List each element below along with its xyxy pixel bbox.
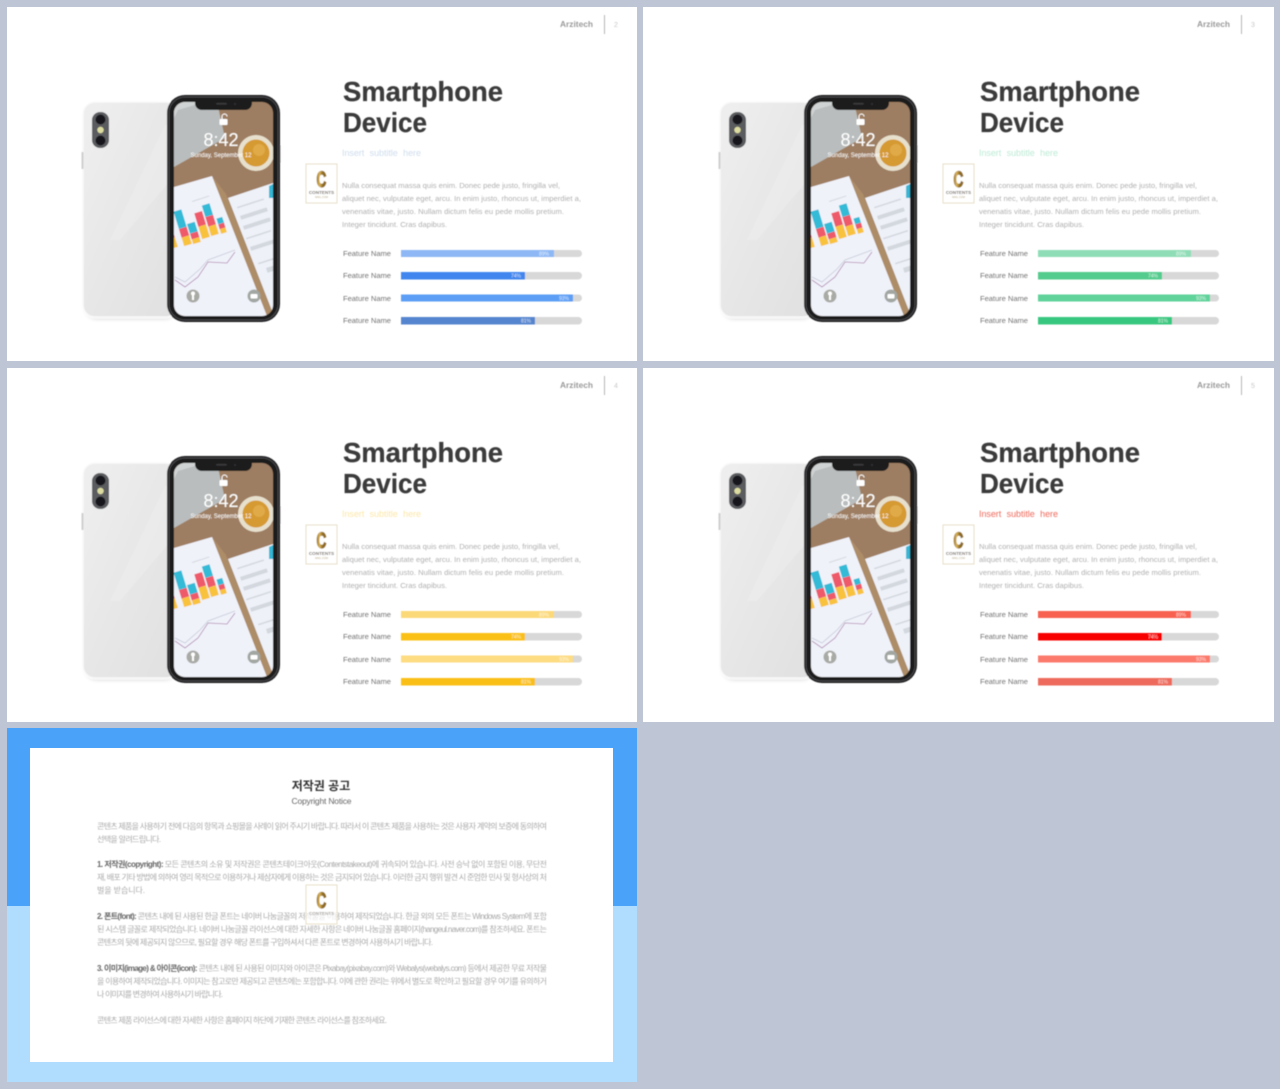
bar chart: feature ratings: Feature Name xyxy=(980,249,1028,258)
text block: copyright terms: 콘텐츠 제품을 사용하기 전에 다음의 항목과 쇼핑몰을 사례이 읽어 주시기 바랍니다. 따라서 이 콘텐츠 제품을 사용하는 것은 사용자 계약의 보증에 동의하여 xyxy=(97,821,547,831)
icon: contents logo: MAIL.COM xyxy=(315,556,328,560)
text block: copyright terms xyxy=(97,821,548,1025)
bar chart: feature ratings: 81% xyxy=(1158,680,1169,686)
icon: smartphone front and back: 8:42 xyxy=(840,491,876,511)
body paragraph: aliquet nec, vulputate eget, arcu. In enim justo, rhoncus ut, imperdiet a, xyxy=(342,555,581,564)
panel: smartphone slide 4, yellow xyxy=(7,368,637,722)
body paragraph: aliquet nec, vulputate eget, arcu. In enim justo, rhoncus ut, imperdiet a, xyxy=(979,555,1218,564)
text block: copyright terms: 1. 저작권(copyright): 모든 콘텐츠의 소유 및 저작권은 콘텐츠테이크아웃(Contentstakeout)에 귀속되어 있습니다. 사전 승낙 없이 포함된 이용, 무단전 xyxy=(97,859,547,869)
bar chart: feature ratings: 74% xyxy=(1148,635,1159,641)
icon: smartphone front and back: Sunday, September 12 xyxy=(191,153,252,159)
header: brand and page number xyxy=(1197,376,1255,395)
bar chart: feature ratings: 81% xyxy=(521,680,532,686)
panel: copyright notice slide xyxy=(7,728,637,1082)
bar chart: feature ratings: Feature Name xyxy=(343,271,391,280)
header: brand and page number: 2 xyxy=(614,22,618,29)
header: brand and page number: 4 xyxy=(614,383,618,390)
title: Smartphone xyxy=(343,76,503,107)
body paragraph xyxy=(979,181,1218,229)
bar chart: feature ratings xyxy=(343,249,582,325)
text block: copyright terms: 선택을 알려드립니다. xyxy=(97,834,161,844)
bar chart: feature ratings: 74% xyxy=(511,635,522,641)
icon: smartphone front and back xyxy=(82,95,280,322)
bar chart: feature ratings: 81% xyxy=(1158,318,1169,324)
header: brand and page number xyxy=(560,376,618,395)
icon: smartphone front and back: 8:42 xyxy=(203,491,239,511)
header: brand and page number xyxy=(560,15,618,34)
icon: contents logo watermark xyxy=(306,885,337,924)
bar chart: feature ratings: Feature Name xyxy=(343,677,391,686)
icon: smartphone front and back xyxy=(718,456,918,683)
icon: smartphone front and back: 8:42 xyxy=(840,130,876,150)
title: Smartphone xyxy=(343,437,503,468)
header: brand and page number: Arzitech xyxy=(1197,381,1230,390)
body paragraph: Nulla consequat massa quis enim. Donec pede justo, fringilla vel, xyxy=(979,542,1197,551)
bar chart: feature ratings: Feature Name xyxy=(980,294,1028,303)
header: brand and page number: Arzitech xyxy=(1197,20,1230,29)
bar chart: feature ratings: 93% xyxy=(1196,657,1207,663)
body paragraph: Integer tincidunt. Cras dapibus. xyxy=(979,220,1084,229)
icon: contents logo xyxy=(306,164,337,203)
bar chart: feature ratings: Feature Name xyxy=(980,271,1028,280)
bar chart: feature ratings: Feature Name xyxy=(343,655,391,664)
title xyxy=(343,437,503,499)
bar chart: feature ratings: 89% xyxy=(539,612,550,618)
bar chart: feature ratings: Feature Name xyxy=(343,632,391,641)
icon: smartphone front and back xyxy=(718,95,918,322)
body paragraph xyxy=(979,542,1218,590)
bar chart: feature ratings: Feature Name xyxy=(343,294,391,303)
icon: contents logo xyxy=(943,525,974,564)
icon: contents logo: CONTENTS xyxy=(946,190,971,195)
icon: contents logo watermark: CONTENTS xyxy=(309,911,334,916)
icon: contents logo watermark: C xyxy=(316,888,326,913)
bar chart: feature ratings: 89% xyxy=(539,251,550,257)
bar chart: feature ratings: 93% xyxy=(559,296,570,302)
icon: contents logo: C xyxy=(316,528,326,553)
title xyxy=(343,76,503,138)
header: brand and page number: 5 xyxy=(1251,383,1255,390)
icon: contents logo: MAIL.COM xyxy=(315,195,328,199)
bar chart: feature ratings: 89% xyxy=(1176,612,1187,618)
body paragraph: Nulla consequat massa quis enim. Donec pede justo, fringilla vel, xyxy=(342,542,560,551)
heading: copyright notice xyxy=(292,778,352,806)
text block: copyright terms: 콘텐츠 제품 라이선스에 대한 자세한 사항은 홈페이지 하단에 기재한 콘텐츠 라이선스를 참조하세요. xyxy=(97,1015,387,1025)
text block: copyright terms: 나 이미지를 변경하여 사용하시기 바랍니다. xyxy=(97,989,223,999)
bar chart: feature ratings: Feature Name xyxy=(980,677,1028,686)
title: Device xyxy=(980,468,1064,499)
icon: smartphone front and back xyxy=(82,456,280,683)
bar chart: feature ratings: 89% xyxy=(1176,251,1187,257)
header: brand and page number xyxy=(1197,15,1255,34)
bar chart: feature ratings xyxy=(343,610,582,686)
panel: smartphone slide 5, red xyxy=(643,368,1274,722)
bar chart: feature ratings: Feature Name xyxy=(980,632,1028,641)
icon: smartphone front and back: Sunday, September 12 xyxy=(191,514,252,520)
heading: copyright notice: 저작권 공고 xyxy=(292,778,350,793)
bar chart: feature ratings: Feature Name xyxy=(343,316,391,325)
body paragraph: aliquet nec, vulputate eget, arcu. In enim justo, rhoncus ut, imperdiet a, xyxy=(979,194,1218,203)
title: Smartphone xyxy=(980,76,1140,107)
bar chart: feature ratings: 93% xyxy=(559,657,570,663)
body paragraph xyxy=(342,181,581,229)
header: brand and page number: 3 xyxy=(1251,22,1255,29)
bar chart: feature ratings: 93% xyxy=(1196,296,1207,302)
header: brand and page number: Arzitech xyxy=(560,381,593,390)
icon: contents logo: MAIL.COM xyxy=(952,195,965,199)
text block: copyright terms: 2. 폰트(font): 콘텐츠 내에 된 사용된 한글 폰트는 네이버 나눔글꼴의 저작물을 이용하여 제작되었습니다. 한글 외의 모든 폰트는 Windows System에 포함 xyxy=(97,911,548,921)
panel: smartphone slide 2, blue xyxy=(7,7,637,361)
body paragraph: venenatis vitae, justo. Nullam dictum felis eu pede mollis pretium. xyxy=(979,207,1201,216)
bar chart: feature ratings: Feature Name xyxy=(343,610,391,619)
body paragraph: venenatis vitae, justo. Nullam dictum felis eu pede mollis pretium. xyxy=(342,568,564,577)
bar chart: feature ratings: 81% xyxy=(521,318,532,324)
bar chart: feature ratings: Feature Name xyxy=(980,655,1028,664)
body paragraph: venenatis vitae, justo. Nullam dictum felis eu pede mollis pretium. xyxy=(979,568,1201,577)
panel: smartphone slide 3, green xyxy=(643,7,1274,361)
bar chart: feature ratings: Feature Name xyxy=(980,610,1028,619)
subtitle: Insert subtitle here xyxy=(342,148,421,158)
icon: contents logo xyxy=(306,525,337,564)
icon: contents logo xyxy=(943,164,974,203)
bar chart: feature ratings xyxy=(980,610,1219,686)
title: Smartphone xyxy=(980,437,1140,468)
icon: smartphone front and back: Sunday, September 12 xyxy=(828,153,889,159)
bar chart: feature ratings: 74% xyxy=(511,274,522,280)
subtitle: Insert subtitle here xyxy=(342,509,421,519)
text block: copyright terms: 벌을 받습니다. xyxy=(97,885,145,895)
body paragraph: Nulla consequat massa quis enim. Donec pede justo, fringilla vel, xyxy=(979,181,1197,190)
bar chart: feature ratings: Feature Name xyxy=(980,316,1028,325)
text block: copyright terms: 을 이용하여 제작되었습니다. 이미지는 참고로만 제공되고 콘텐츠에는 포함합니다. 이에 관한 권리는 위에서 별도로 확인하고 필요할 경우 여기를 유의하거 xyxy=(97,976,547,986)
bar chart: feature ratings: Feature Name xyxy=(343,249,391,258)
title: Device xyxy=(980,107,1064,138)
subtitle: Insert subtitle here xyxy=(979,148,1058,158)
body paragraph: Integer tincidunt. Cras dapibus. xyxy=(979,581,1084,590)
title: Device xyxy=(343,468,427,499)
subtitle: Insert subtitle here xyxy=(979,509,1058,519)
bar chart: feature ratings xyxy=(980,249,1219,325)
icon: contents logo: C xyxy=(954,528,963,553)
icon: contents logo: MAIL.COM xyxy=(952,556,965,560)
text block: copyright terms: 콘텐츠의 뒷에 제공되지 않으므로, 필요할 경우 해당 폰트를 구입하셔서 다른 폰트로 변경하여 사용하시기 바랍니다. xyxy=(97,937,433,947)
icon: contents logo: CONTENTS xyxy=(946,551,971,556)
icon: smartphone front and back: 8:42 xyxy=(203,130,239,150)
bar chart: feature ratings: 74% xyxy=(1148,274,1159,280)
icon: contents logo: CONTENTS xyxy=(309,551,334,556)
body paragraph: Integer tincidunt. Cras dapibus. xyxy=(342,220,447,229)
body paragraph: venenatis vitae, justo. Nullam dictum felis eu pede mollis pretium. xyxy=(342,207,564,216)
body paragraph xyxy=(342,542,581,590)
title xyxy=(980,76,1140,138)
icon: smartphone front and back: Sunday, September 12 xyxy=(828,514,889,520)
text block: copyright terms: 된 시스템 글꼴로 제작되었습니다. 네이버 나눔글꼴 라이선스에 대한 자세한 사항은 네이버 나눔글꼴 홈페이지(hangeul.naver.com)를 참조하세요. 폰트는 xyxy=(97,924,547,934)
body paragraph: aliquet nec, vulputate eget, arcu. In enim justo, rhoncus ut, imperdiet a, xyxy=(342,194,581,203)
icon: contents logo: C xyxy=(954,167,963,192)
header: brand and page number: Arzitech xyxy=(560,20,593,29)
icon: contents logo: CONTENTS xyxy=(309,190,334,195)
body paragraph: Integer tincidunt. Cras dapibus. xyxy=(342,581,447,590)
icon: contents logo: C xyxy=(316,167,326,192)
title xyxy=(980,437,1140,499)
title: Device xyxy=(343,107,427,138)
body paragraph: Nulla consequat massa quis enim. Donec pede justo, fringilla vel, xyxy=(342,181,560,190)
heading: copyright notice: Copyright Notice xyxy=(292,796,352,806)
text block: copyright terms: 재, 배포 기타 방법에 의하여 영리 목적으로 이용하거나 제삼자에게 이용하는 것은 금지되어 있습니다. 이러한 금지 행위 발견 시 준엄한 민사 및 형사상의 처 xyxy=(97,872,547,882)
text block: copyright terms: 3. 이미지(image) & 아이콘(icon): 콘텐츠 내에 된 사용된 이미지와 아이콘은 Pixabay(pixabay.com)와 Webalys(webalys.com) 등에서 제공한 무료 저작물 xyxy=(97,963,547,973)
